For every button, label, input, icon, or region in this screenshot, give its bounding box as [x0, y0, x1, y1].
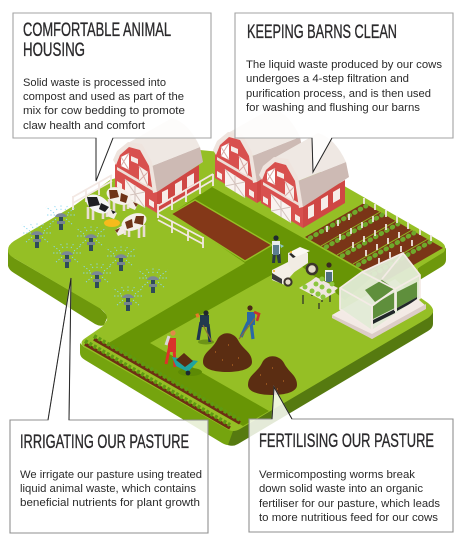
farmer with clipboard: [272, 235, 284, 263]
farm land platform: [8, 150, 446, 446]
body text: compost and used as part of the: [23, 91, 184, 103]
cows and hay: [83, 184, 149, 238]
heading: [23, 20, 171, 61]
callout: comfortable animal housing: [13, 13, 211, 181]
body text: fertiliser for our pasture, which leads: [259, 498, 441, 510]
heading: IRRIGATING OUR PASTURE: [20, 432, 189, 453]
body text: The liquid waste produced by our cows: [246, 59, 443, 71]
cow brown back: [104, 184, 138, 212]
body text: liquid animal waste, which contains: [20, 483, 197, 495]
body text: We irrigate our pasture using treated: [20, 469, 202, 481]
callout: irrigating our pasture: [10, 278, 208, 533]
greenhouse: [332, 253, 426, 339]
body text: Vermicomposting worms break: [259, 469, 416, 481]
brown plot: [171, 200, 272, 261]
fences: [73, 174, 213, 248]
body text: down solid waste into an organic: [259, 483, 424, 495]
compost pile 1: [203, 333, 252, 372]
worker with wheelbarrow: [166, 330, 202, 376]
body text: [259, 469, 441, 524]
body text: [246, 59, 443, 114]
farmer at table: [325, 262, 333, 282]
barn 1: [113, 118, 203, 213]
body text: [23, 77, 185, 132]
body text: purification process, and is then used: [246, 88, 431, 100]
lower right side face: [228, 311, 433, 446]
left side face: [8, 250, 108, 326]
heading: HOUSING: [23, 40, 85, 61]
seedling tables: [299, 276, 338, 309]
worker with shovel left: [196, 310, 214, 344]
crop rows: [85, 336, 240, 428]
body text: claw health and comfort: [23, 120, 145, 132]
sprinklers: [22, 204, 168, 311]
body text: for washing and flushing our barns: [246, 102, 421, 114]
heading: COMFORTABLE ANIMAL: [23, 20, 171, 41]
barn 2: [213, 108, 303, 203]
body text: mix for cow bedding to promote: [23, 105, 185, 117]
greenhouse base: [332, 279, 426, 339]
body text: beneficial nutrients for plant growth: [20, 497, 200, 509]
body text: to more nutritious feed for our cows: [259, 512, 439, 524]
plant beds: [365, 280, 395, 302]
callout: fertilising our pasture: [249, 387, 453, 532]
cow brown front: [115, 210, 149, 238]
body text: [20, 469, 202, 509]
barn 3: [259, 133, 349, 228]
worker with shovel right: [239, 305, 259, 339]
upper right side face: [418, 248, 446, 281]
callout: keeping barns clean: [235, 13, 453, 172]
tractor: [272, 247, 318, 287]
cow black: [83, 191, 117, 220]
body text: Solid waste is processed into: [23, 77, 166, 89]
lower left side face: [80, 343, 240, 445]
body text: undergoes a 4-step filtration and: [246, 73, 409, 85]
compost pile 2: [248, 356, 297, 395]
crop field: [305, 198, 443, 282]
hay: [104, 219, 120, 227]
greenhouse frame and glass: [340, 253, 420, 330]
dark green road: [107, 187, 372, 426]
top surface: [8, 150, 445, 431]
